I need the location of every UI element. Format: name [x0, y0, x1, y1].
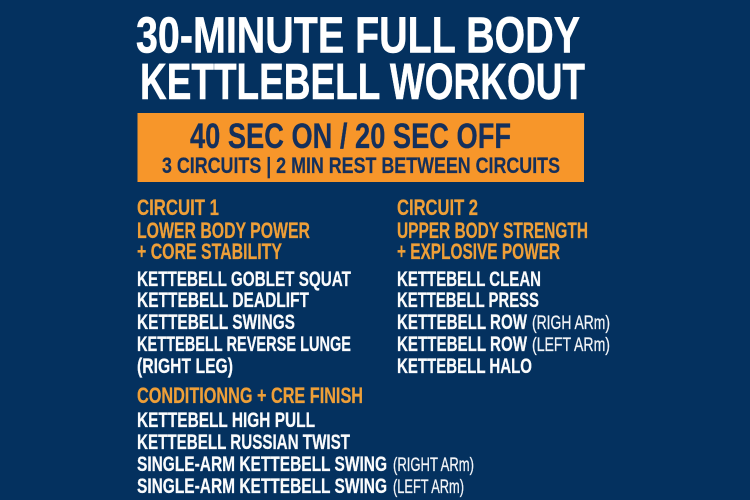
- exercise list: circuit 2: KETTEBELL ROW: [397, 310, 527, 334]
- heading: conditioning: CONDITIONNG + CRE FINISH: [137, 383, 363, 408]
- exercise list: circuit 1: [137, 267, 351, 378]
- heading: circuit 2: CIRCUIT 2: [397, 195, 478, 220]
- heading: circuit 1: + CORE STABILITY: [137, 239, 282, 264]
- exercise list: circuit 2: [397, 267, 610, 378]
- title: KETTLEBELL WORKOUT: [140, 53, 585, 110]
- banner: timing: [138, 113, 584, 182]
- exercise list: circuit 2: KETTEBELL HALO: [397, 354, 532, 378]
- exercise list: conditioning: (RIGHT ARm): [393, 454, 474, 476]
- exercise list: circuit 2: KETTEBELL ROW: [397, 332, 527, 356]
- exercise list: circuit 1: KETTEBELL DEADLIFT: [137, 288, 309, 312]
- exercise list: conditioning: KETTEBELL HIGH PULL: [137, 408, 315, 432]
- title: 30-MINUTE FULL BODY: [136, 6, 580, 64]
- exercise list: circuit 2: KETTEBELL PRESS: [397, 288, 539, 312]
- heading: circuit 1: CIRCUIT 1: [137, 195, 219, 220]
- banner: timing: 40 SEC ON / 20 SEC OFF: [190, 116, 511, 156]
- heading: circuit 2: + EXPLOSIVE POWER: [397, 239, 560, 264]
- exercise list: conditioning: KETTEBELL RUSSIAN TWIST: [137, 430, 350, 454]
- exercise list: circuit 2: (LEFT ARm): [532, 334, 610, 356]
- panel: circuit 2: [397, 195, 610, 378]
- exercise list: circuit 2: (RIGH ARm): [532, 312, 610, 334]
- title: [136, 6, 585, 110]
- panel: circuit 1: [137, 195, 351, 378]
- heading: circuit 1: LOWER BODY POWER: [137, 218, 310, 243]
- exercise list: conditioning: SINGLE-ARM KETTEBELL SWING: [137, 452, 387, 476]
- banner: timing: 3 CIRCUITS | 2 MIN REST BETWEEN CIRCUITS: [162, 153, 560, 178]
- heading: circuit 1: [137, 195, 310, 264]
- exercise list: conditioning: (LEFT ARm): [393, 476, 464, 498]
- heading: circuit 2: [397, 195, 588, 264]
- exercise list: circuit 1: KETTEBELL GOBLET SQUAT: [137, 267, 351, 291]
- exercise list: circuit 1: (RIGHT LEG): [137, 354, 233, 378]
- heading: circuit 2: UPPER BODY STRENGTH: [397, 218, 588, 243]
- exercise list: circuit 2: KETTEBELL CLEAN: [397, 267, 541, 291]
- exercise list: circuit 1: KETTEBELL SWINGS: [137, 310, 295, 334]
- panel: conditioning + core finish: [137, 383, 474, 498]
- exercise list: conditioning: SINGLE-ARM KETTEBELL SWING: [137, 474, 387, 498]
- exercise list: circuit 1: KETTEBELL REVERSE LUNGE: [137, 332, 351, 356]
- exercise list: conditioning: [137, 408, 474, 498]
